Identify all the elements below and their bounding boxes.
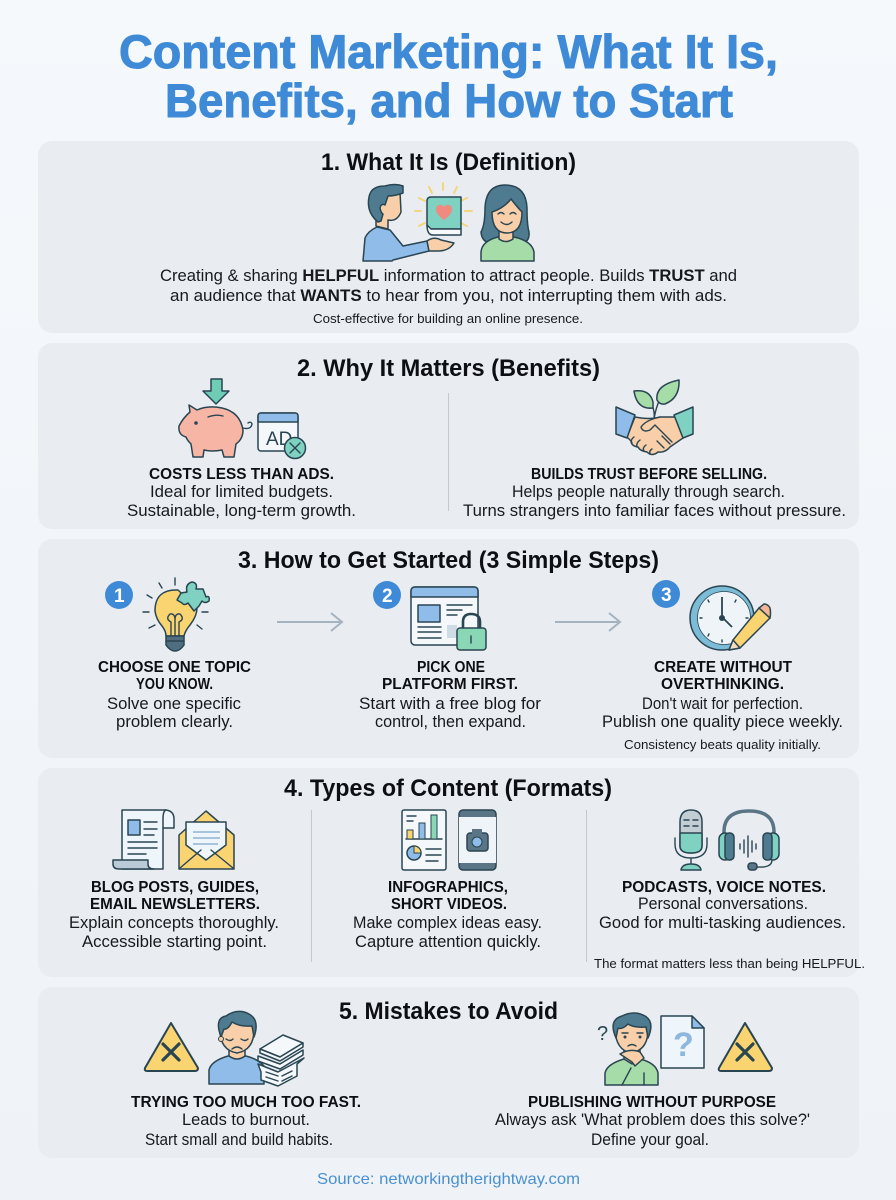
icon: warning triangle left bbox=[145, 1023, 198, 1071]
arrow: step 2 to 3 bbox=[555, 613, 620, 631]
format 2 text: Capture attention quickly. bbox=[355, 932, 541, 951]
icon: man giving book to woman bbox=[363, 183, 534, 261]
body text: definition: an audience that WANTS to hear from you, not interrupting them with ads. bbox=[170, 286, 727, 305]
icon: microphone and headphones bbox=[675, 810, 779, 870]
title bbox=[119, 25, 778, 127]
benefit: builds trust before selling: BUILDS TRUST BEFORE SELLING. bbox=[531, 466, 767, 483]
step 1 text bbox=[98, 659, 251, 731]
mistake 1 text: Leads to burnout. bbox=[182, 1110, 310, 1129]
icon: light bulb and puzzle piece bbox=[143, 578, 209, 651]
benefit: builds trust before selling: Turns strangers into familiar faces without pressure. bbox=[463, 501, 846, 520]
heading: how to get started: 3. How to Get Started (3 Simple Steps) bbox=[238, 547, 659, 574]
step 2 text bbox=[359, 659, 541, 731]
body text: definition: Creating & sharing HELPFUL information to attract people. Builds TRUST and bbox=[160, 266, 737, 285]
format 1 text: Accessible starting point. bbox=[82, 932, 267, 951]
icon: thinking person with question document: ? bbox=[597, 1023, 608, 1045]
step 2 text: PICK ONE bbox=[417, 659, 485, 676]
step badge 1 bbox=[105, 581, 133, 609]
panel: how to get started bbox=[38, 539, 859, 758]
step 3 text bbox=[602, 659, 843, 731]
format 3 text: Good for multi-tasking audiences. bbox=[599, 913, 846, 932]
format 3 text: PODCASTS, VOICE NOTES. bbox=[622, 879, 826, 896]
icon: blog scroll and envelope bbox=[113, 810, 234, 869]
step badge 2 bbox=[373, 581, 401, 609]
benefit: costs less than ads bbox=[127, 466, 356, 520]
step 1 text: CHOOSE ONE TOPIC bbox=[98, 659, 251, 676]
format 1 text bbox=[69, 879, 279, 951]
step 2 text: PLATFORM FIRST. bbox=[382, 676, 518, 693]
heading: what it is: 1. What It Is (Definition) bbox=[321, 149, 576, 176]
format 3 text: Personal conversations. bbox=[638, 894, 808, 913]
heading: mistakes to avoid: 5. Mistakes to Avoid bbox=[339, 998, 558, 1025]
step 1 text: Solve one specific bbox=[107, 694, 241, 713]
note: consistency: Consistency beats quality initially. bbox=[624, 737, 821, 752]
body text: definition bbox=[160, 266, 737, 305]
mistake 2 text bbox=[495, 1094, 810, 1149]
icon: thinking person with question document: ? bbox=[673, 1026, 694, 1064]
icon: handshake with sprout bbox=[616, 380, 693, 454]
mistake 2 text: PUBLISHING WITHOUT PURPOSE bbox=[528, 1094, 776, 1111]
format 1 text: Explain concepts thoroughly. bbox=[69, 913, 279, 932]
step 1 text: YOU KNOW. bbox=[136, 676, 213, 693]
mistake 1 text: Start small and build habits. bbox=[145, 1130, 333, 1149]
benefit: costs less than ads: COSTS LESS THAN ADS. bbox=[149, 466, 334, 483]
mistake 1 text: TRYING TOO MUCH TOO FAST. bbox=[131, 1094, 361, 1111]
icon: warning triangle right bbox=[719, 1023, 772, 1071]
title: Benefits, and How to Start bbox=[165, 74, 733, 127]
step 1 text: problem clearly. bbox=[116, 712, 233, 731]
step badge 3 bbox=[652, 580, 680, 608]
icon: piggy bank and crossed-out ad: AD bbox=[266, 429, 292, 450]
format 3 text bbox=[599, 879, 846, 932]
format 2 text: SHORT VIDEOS. bbox=[391, 896, 507, 913]
benefit: builds trust before selling: Helps people naturally through search. bbox=[512, 482, 785, 501]
source line: Source: networkingtherightway.com bbox=[317, 1171, 580, 1188]
format 1 text: BLOG POSTS, GUIDES, bbox=[91, 879, 259, 896]
step 3 text: OVERTHINKING. bbox=[661, 676, 784, 693]
heading: types of content: 4. Types of Content (Formats) bbox=[284, 775, 612, 802]
icon: piggy bank and crossed-out ad bbox=[179, 379, 306, 458]
heading: why it matters: 2. Why It Matters (Benefits) bbox=[297, 355, 600, 382]
note: format matters less: The format matters less than being HELPFUL. bbox=[594, 956, 865, 971]
format 2 text bbox=[353, 879, 542, 951]
step 3 text: Publish one quality piece weekly. bbox=[602, 712, 843, 731]
icon: browser window and padlock bbox=[411, 587, 486, 650]
mistake 2 text: Define your goal. bbox=[591, 1130, 709, 1149]
panel: what it is bbox=[38, 141, 859, 333]
step 3 text: Don't wait for perfection. bbox=[642, 694, 803, 713]
panel: why it matters bbox=[38, 343, 859, 529]
format 1 text: EMAIL NEWSLETTERS. bbox=[90, 896, 260, 913]
icon: clock and pencil bbox=[690, 586, 770, 650]
panel: types of content bbox=[38, 768, 865, 977]
benefit: builds trust before selling bbox=[463, 466, 846, 520]
step badge 1: 1 bbox=[114, 586, 125, 607]
note: cost effective: Cost-effective for building an online presence. bbox=[313, 311, 583, 326]
step badge 3: 3 bbox=[661, 585, 672, 606]
arrow: step 1 to 2 bbox=[277, 613, 342, 631]
benefit: costs less than ads: Sustainable, long-term growth. bbox=[127, 501, 356, 520]
format 2 text: INFOGRAPHICS, bbox=[388, 879, 508, 896]
step 2 text: control, then expand. bbox=[375, 712, 526, 731]
icon: infographic page and phone bbox=[402, 810, 496, 870]
step 2 text: Start with a free blog for bbox=[359, 694, 541, 713]
panel: mistakes to avoid bbox=[38, 987, 859, 1158]
benefit: costs less than ads: Ideal for limited budgets. bbox=[150, 482, 333, 501]
step badge 2: 2 bbox=[382, 586, 393, 607]
icon: tired person with paper stack bbox=[209, 1011, 304, 1086]
mistake 1 text bbox=[131, 1094, 361, 1149]
step 3 text: CREATE WITHOUT bbox=[654, 659, 792, 676]
mistake 2 text: Always ask 'What problem does this solve?' bbox=[495, 1110, 810, 1129]
title: Content Marketing: What It Is, bbox=[119, 25, 778, 78]
icon: thinking person with question document bbox=[597, 1013, 704, 1085]
format 2 text: Make complex ideas easy. bbox=[353, 913, 542, 932]
